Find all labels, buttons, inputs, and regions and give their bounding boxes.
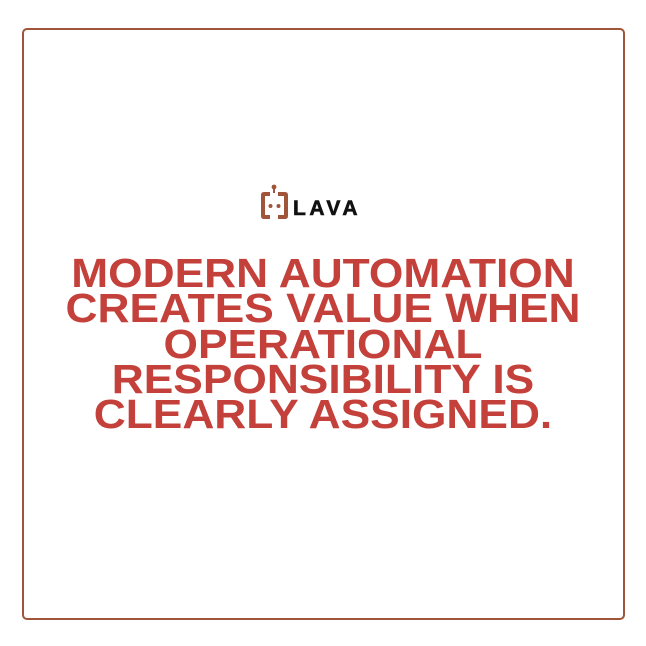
headline text: CLEARLY ASSIGNED.	[94, 391, 552, 437]
logo text: LAVA	[293, 197, 361, 220]
headline text	[66, 250, 580, 437]
headline text: OPERATIONAL	[163, 321, 482, 367]
headline text: MODERN AUTOMATION	[71, 250, 575, 296]
headline text: RESPONSIBILITY IS	[112, 356, 534, 402]
headline text: CREATES VALUE WHEN	[66, 285, 580, 331]
icon: robot head	[263, 185, 286, 217]
logo: LAVA	[261, 184, 361, 220]
